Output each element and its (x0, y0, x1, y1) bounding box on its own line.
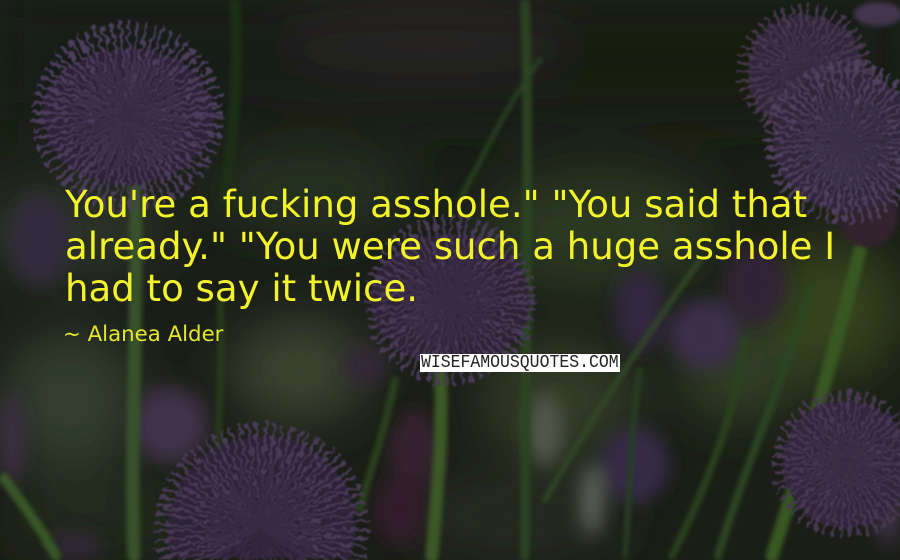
flower: bottom (168, 436, 356, 558)
flower: center (370, 234, 530, 366)
quote text: had to say it twice. (65, 267, 418, 310)
bud shape at right edge (838, 183, 898, 247)
quote text: You're a fucking asshole." "You said that (65, 183, 807, 226)
small top-right flower (854, 2, 900, 26)
quote text (65, 183, 835, 310)
author attribution: ~ Alanea Alder (63, 322, 223, 347)
flower: top right front (774, 72, 900, 212)
flower: top left (42, 48, 214, 184)
quote text: already." "You were such a huge asshole I (65, 225, 835, 268)
flower: top right back (747, 14, 863, 130)
flower: bottom right (782, 400, 900, 528)
soft background flowers (0, 194, 900, 559)
